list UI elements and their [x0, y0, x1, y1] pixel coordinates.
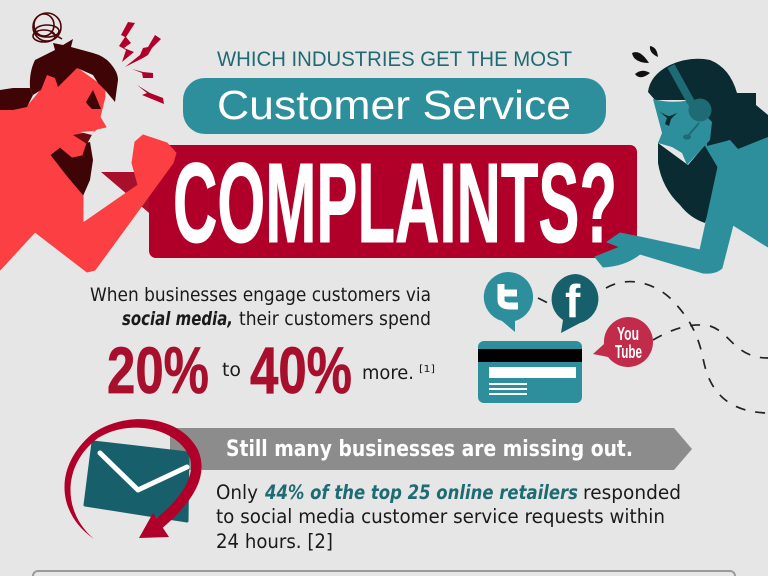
back hair [648, 59, 768, 149]
text: 44 percent of retailers [216, 481, 681, 553]
lower hair [50, 142, 93, 196]
icon: credit card [478, 341, 582, 403]
heading pill: customer service: Customer Service [217, 82, 571, 128]
banner arrow: still many businesses: Still many businesses are missing out. [226, 437, 633, 462]
text: 44 percent of retailers: responded [583, 481, 681, 504]
statistic: 20% to 40% more: [1] [419, 364, 435, 375]
statistic: 20% to 40% more [107, 333, 435, 407]
lower hair [658, 143, 722, 223]
text: social media intro: their customers spend [239, 308, 431, 330]
statistic: 20% to 40% more: 20% [107, 333, 209, 407]
text: 44 percent of retailers: 44% of the top 25 online retailers [264, 481, 578, 504]
icon: youtube bubble: Tube [615, 342, 642, 362]
icon: youtube bubble [593, 317, 653, 367]
icon: anger lightning [119, 22, 164, 104]
next panel top edge [33, 571, 735, 576]
statistic: 20% to 40% more: 40% [250, 333, 352, 407]
headset [671, 66, 712, 140]
sweat drops [632, 46, 658, 77]
illustration: angry customer [0, 13, 176, 272]
banner arrow: still many businesses [170, 428, 692, 470]
text: 44 percent of retailers: 24 hours. [2] [216, 530, 333, 553]
text: 44 percent of retailers: Only [216, 481, 258, 504]
text: 44 percent of retailers: to social media customer service requests within [216, 505, 665, 528]
speech tail of red banner [101, 172, 155, 218]
body and arm [0, 68, 176, 272]
icon: youtube bubble: You [617, 324, 639, 344]
back hair [0, 88, 33, 110]
statistic: 20% to 40% more: to [222, 359, 241, 381]
face [653, 99, 712, 165]
icon: facebook bubble: f [565, 275, 581, 327]
icon: envelope with return arrow [64, 419, 202, 539]
illustration: support agent [595, 46, 768, 273]
text: social media intro: social media, [122, 308, 233, 330]
heading: which industries: WHICH INDUSTRIES GET THE MOST [217, 48, 572, 71]
eye [86, 90, 101, 109]
text: social media intro [90, 284, 431, 330]
mouth [73, 131, 94, 144]
hair bun scribble [33, 13, 62, 42]
dashed connector lines [538, 282, 768, 413]
heading pill: customer service [183, 78, 606, 134]
body and arm [595, 137, 768, 273]
statistic: 20% to 40% more: more. [362, 362, 414, 384]
eye [659, 111, 677, 126]
icon: facebook bubble [552, 274, 598, 333]
icon: twitter bubble [484, 272, 533, 332]
text: social media intro: When businesses engage customers via [90, 284, 431, 306]
top hair [30, 39, 118, 102]
